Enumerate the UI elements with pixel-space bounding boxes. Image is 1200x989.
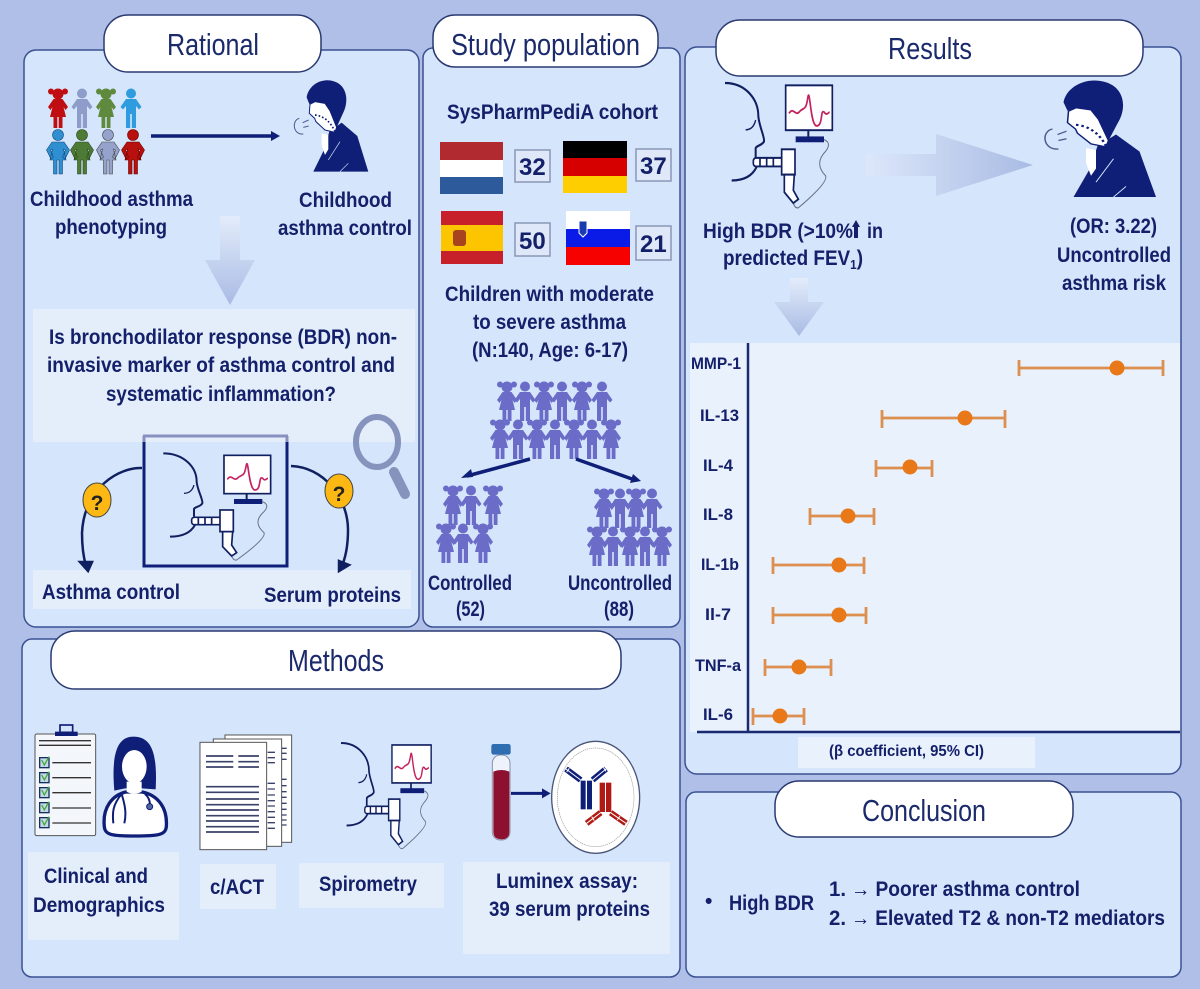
text: children description: (N:140, Age: 6-17): [472, 339, 628, 362]
heading pill: conclusion: [775, 781, 1073, 837]
text: childhood asthma control: Childhood: [299, 189, 392, 212]
count: 32: [515, 150, 550, 182]
arrow: to controlled: [461, 459, 530, 478]
text: children description: Children with moderate: [445, 283, 654, 306]
label: controlled: (52): [456, 598, 485, 621]
flag: Netherlands: [440, 142, 503, 194]
row: IL-8: IL-8: [703, 505, 733, 524]
box: luminex assay: Luminex assay:: [496, 870, 638, 893]
heading pill: study population: [433, 15, 658, 67]
question box: systematic inflammation?: [106, 383, 336, 406]
heading pill: study population: Study population: [451, 27, 640, 62]
count: 50: [515, 223, 550, 256]
row: TNF-a: TNF-a: [695, 656, 742, 675]
forest plot: [690, 343, 1180, 732]
icon: question marker left: ?: [91, 492, 103, 515]
text: conclusion bullet: 2.: [829, 907, 846, 930]
arrow: to serum proteins: [291, 466, 349, 571]
count: 32: 32: [519, 154, 546, 181]
question box: [33, 309, 415, 442]
arrow: right gradient: [866, 134, 1033, 196]
label: serum proteins: Serum proteins: [264, 584, 401, 607]
flag: Spain: [441, 211, 503, 264]
count: 37: [636, 149, 671, 181]
text: conclusion bullet: → Elevated T2 & non-T2 mediators: [851, 907, 1165, 930]
text: high BDR: ): [857, 247, 863, 270]
count: 37: 37: [640, 153, 667, 180]
label: uncontrolled: (88): [604, 598, 634, 621]
heading pill: methods: Methods: [288, 643, 384, 678]
count: 21: 21: [640, 231, 667, 258]
label: uncontrolled: Uncontrolled: [568, 572, 672, 595]
icon: question marker right: [325, 474, 353, 508]
icon: questionnaire documents: [200, 735, 292, 850]
label: uncontrolled: [568, 572, 672, 621]
row: IL-13: IL-13: [700, 406, 739, 425]
text: odds ratio: (OR: 3.22): [1070, 215, 1157, 238]
heading pill: results: Results: [888, 31, 972, 66]
box: clinical and demographics: [28, 852, 179, 940]
row: IL-13: [700, 406, 1005, 428]
icon: clipboard checklist: [35, 725, 96, 836]
icon: group of children: [46, 88, 144, 174]
row: IL-1b: IL-1b: [701, 555, 739, 574]
arrow: phenotyping to control: [151, 131, 280, 141]
icon: question marker left: [83, 483, 111, 517]
row: MMP-1: MMP-1: [691, 354, 741, 373]
heading pill: Rational: [104, 15, 321, 72]
panel: results: [685, 20, 1181, 774]
heading pill: Rational: Rational: [167, 27, 259, 62]
flag: Slovenia: [566, 211, 630, 265]
text: childhood asthma phenotyping: phenotyping: [55, 216, 167, 239]
label: controlled: [428, 572, 512, 621]
row: Il-7: [705, 605, 866, 624]
icon: spirometry: [341, 743, 431, 849]
box: luminex assay: [463, 862, 670, 954]
box: c/ACT: c/ACT: [210, 876, 264, 899]
text: odds ratio: [1057, 215, 1171, 295]
label: controlled: Controlled: [428, 572, 512, 595]
text: childhood asthma phenotyping: [30, 188, 193, 239]
text: conclusion bullet: •: [705, 890, 712, 913]
text: odds ratio: Uncontrolled: [1057, 244, 1171, 267]
count: 50: 50: [519, 228, 546, 255]
arrow: to uncontrolled: [576, 459, 641, 483]
icon: spirometry framed: [143, 436, 288, 566]
heading pill: methods: [51, 631, 621, 689]
icon: controlled children: [436, 486, 503, 563]
row: MMP-1: [691, 354, 1163, 376]
icon: blood tube and antibodies: [491, 741, 640, 853]
text: odds ratio: asthma risk: [1062, 272, 1166, 295]
row: IL-1b: [701, 555, 864, 574]
row: IL-4: [703, 456, 932, 477]
row: IL-4: IL-4: [703, 456, 734, 475]
panel: rational: [24, 15, 419, 627]
box: luminex assay: 39 serum proteins: [489, 898, 650, 921]
text: childhood asthma control: asthma control: [278, 217, 412, 240]
text: conclusion bullet: High BDR: [729, 892, 814, 915]
arrow: down gradient: [205, 216, 255, 305]
row: IL-6: [703, 705, 804, 725]
box: clinical and demographics: Demographics: [33, 894, 165, 917]
icon: doctor: [104, 737, 166, 836]
box: c/ACT: [200, 864, 276, 909]
row: IL-8: [703, 505, 874, 525]
text: conclusion bullet: → Poorer asthma control: [851, 878, 1080, 901]
question box: invasive marker of asthma control and: [47, 354, 395, 377]
text: high BDR: 1: [850, 257, 857, 272]
text: childhood asthma phenotyping: Childhood asthma: [30, 188, 193, 211]
panel: methods: [22, 631, 680, 977]
icon: uncontrolled children: [587, 488, 672, 566]
text: conclusion bullet: [705, 878, 1165, 930]
arrow: down gradient: [774, 278, 824, 336]
icon: question marker right: ?: [333, 483, 345, 506]
question box: Is bronchodilator response (BDR) non-: [49, 326, 397, 349]
text: high BDR: in: [867, 220, 883, 243]
heading pill: conclusion: Conclusion: [862, 793, 986, 828]
box: spirometry: Spirometry: [319, 873, 417, 896]
axis label: (β coefficient, 95% CI): [829, 743, 984, 760]
heading pill: results: [716, 20, 1143, 76]
icon: magnifier: [356, 417, 405, 494]
text: high BDR: [703, 220, 883, 272]
icon: coughing person: [1045, 80, 1156, 197]
icon: spirometry: [725, 83, 832, 208]
text: children description: to severe asthma: [473, 311, 626, 334]
panel: conclusion: [686, 781, 1181, 977]
axis label: [798, 737, 1035, 768]
arrow: to asthma control: [80, 468, 142, 571]
row: Il-7: Il-7: [705, 605, 731, 624]
box: clinical and demographics: Clinical and: [44, 865, 148, 888]
row: IL-6: IL-6: [703, 705, 733, 724]
text: children description: [445, 283, 654, 362]
icon: coughing person: [294, 80, 368, 172]
text: childhood asthma control: [278, 189, 412, 240]
text: high BDR: High BDR (>10%: [703, 220, 853, 243]
panel: study population: [423, 15, 680, 627]
icon: all children: [490, 382, 621, 459]
flag: Germany: [563, 141, 627, 193]
row: TNF-a: [695, 656, 831, 676]
label: asthma control: Asthma control: [42, 581, 180, 604]
text: conclusion bullet: 1.: [829, 878, 846, 901]
label band: [33, 570, 411, 609]
count: 21: [636, 226, 671, 260]
box: spirometry: [299, 863, 444, 908]
text: cohort: SysPharmPediA cohort: [447, 101, 658, 124]
text: high BDR: predicted FEV: [723, 247, 864, 270]
